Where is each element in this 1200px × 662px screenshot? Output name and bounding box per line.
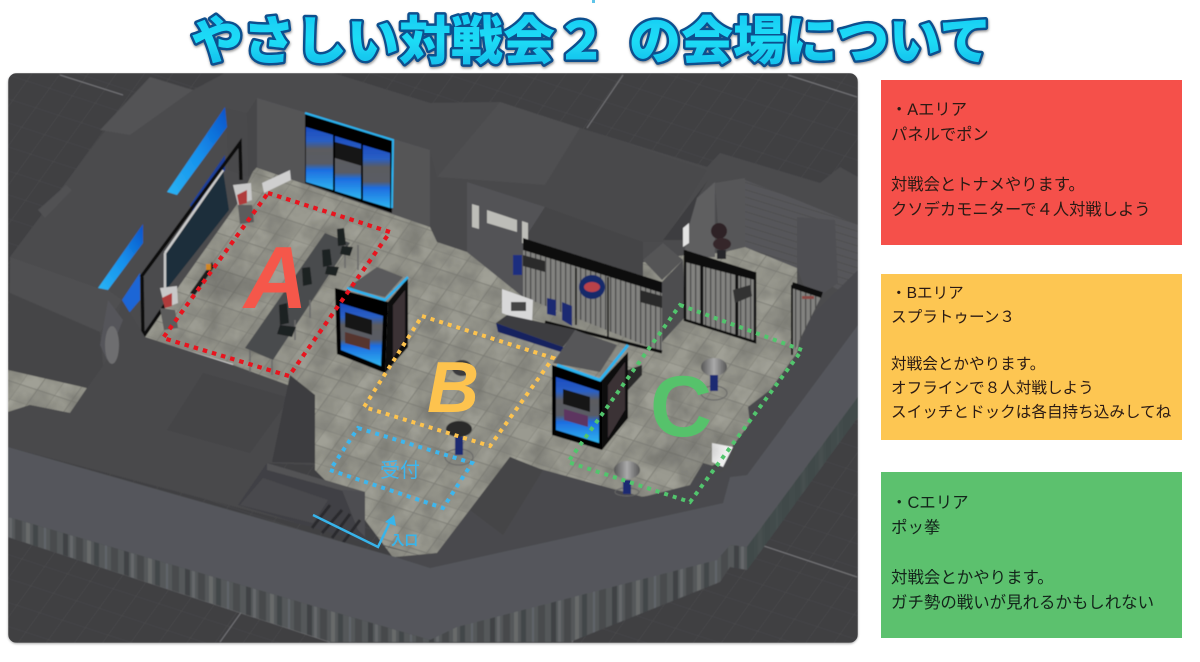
gate: far right: [792, 285, 822, 355]
zone outline A: [163, 193, 390, 376]
zone letter A: A: [242, 228, 308, 327]
panel: area A description: [881, 80, 1182, 245]
panel: area B description: スイッチとドックは各自持ち込みしてね: [891, 404, 1171, 421]
icon: potted plant: [711, 223, 731, 259]
gate: right: [685, 250, 755, 342]
back wall: [226, 98, 643, 297]
panel: area B description: ・Bエリア: [891, 285, 964, 302]
ground grid: [8, 73, 858, 643]
center booth: [523, 238, 685, 352]
panel: area B description: 対戦会とかやります。: [891, 356, 1045, 373]
standing tables: [445, 358, 727, 496]
reception label: 受付: [380, 459, 420, 482]
panel: area C description: [881, 472, 1182, 638]
front wall face: [8, 325, 858, 640]
zone letter C: C: [650, 359, 712, 455]
textured plinth strip: [8, 397, 858, 642]
lower right roof inset: [470, 457, 543, 535]
kiosk: center: [552, 330, 642, 450]
sign stand and banners: [160, 170, 291, 330]
panel: area B description: スプラトゥーン３: [891, 309, 1015, 326]
plinth shaded right side: [747, 397, 858, 570]
panel: area C description: ポッ拳: [891, 519, 940, 537]
panel: area B description: [881, 274, 1182, 440]
entrance arrow: 入口: [391, 533, 418, 548]
entrance arrow: [313, 515, 418, 548]
title: [189, 0, 991, 72]
panel: area B description: オフラインで８人対戦しよう: [891, 380, 1094, 397]
wall frame: [683, 223, 689, 247]
wall signs: [472, 204, 528, 245]
panel: area A description: 対戦会とトナメやります。: [891, 176, 1085, 194]
front wall top band: [8, 270, 858, 568]
panel: area A description: パネルでポン: [891, 126, 989, 144]
zone letter B: B: [427, 348, 479, 428]
bottom edge of room A: [150, 340, 233, 365]
entrance stairs: [238, 463, 377, 547]
kiosk: area A: [335, 267, 408, 373]
right back wall with louvers: [663, 178, 858, 303]
floor tiles: [143, 167, 808, 560]
zone outline reception: [330, 428, 472, 508]
table with chairs: [245, 228, 358, 375]
giant monitor: [141, 143, 241, 337]
zone outline B: [364, 316, 553, 446]
left blue wall strips: [98, 107, 227, 320]
reception counter: [496, 255, 577, 354]
white box: [712, 443, 733, 467]
panel: venue floor map: [8, 73, 858, 643]
panel: area A description: クソデカモニターで４人対戦しよう: [891, 201, 1151, 219]
panel: area A description: ・Aエリア: [891, 101, 967, 119]
gate display: back wall: [305, 113, 393, 213]
panel: area C description: 対戦会とかやります。: [891, 569, 1054, 587]
panel: area C description: ・Cエリア: [891, 494, 969, 512]
lower left roof: [8, 300, 437, 560]
panel: area C description: ガチ勢の戦いが見れるかもしれない: [891, 594, 1154, 612]
shadows on floor: [203, 270, 720, 462]
roof surfaces: [8, 73, 858, 420]
zone outline C: [568, 305, 802, 502]
